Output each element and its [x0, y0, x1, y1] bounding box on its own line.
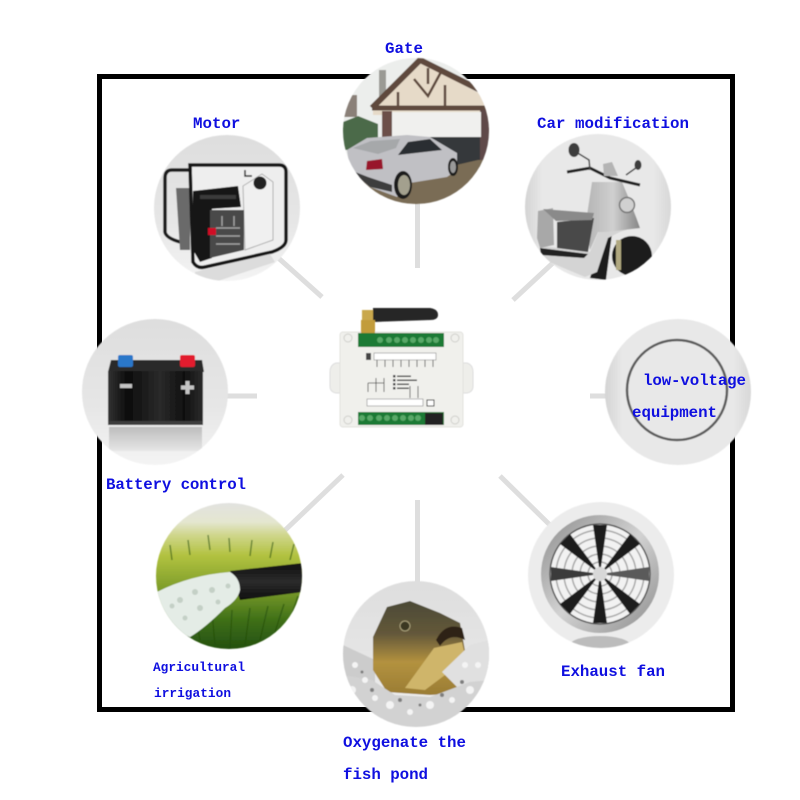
- spec text blocks: [366, 353, 417, 390]
- minus sign: [120, 384, 132, 388]
- fish eye: [400, 621, 410, 631]
- label: motor: Motor: [193, 115, 240, 133]
- footwell: [557, 218, 594, 252]
- label: car modification: Car modification: [537, 115, 689, 133]
- bumper shadow: [356, 172, 392, 192]
- label: gate: Gate: [385, 40, 423, 58]
- ground: [195, 254, 275, 282]
- module housing: [340, 332, 463, 427]
- inner white disc: [550, 524, 650, 624]
- label: oxygenate the: Oxygenate the: [343, 734, 466, 752]
- application: fish pond: [343, 581, 490, 730]
- label: low-voltage: low-voltage: [643, 372, 746, 390]
- plus sign: [181, 381, 194, 394]
- front wheel: [612, 236, 652, 276]
- concentric guards: [556, 530, 644, 618]
- fish mouth: [436, 626, 465, 646]
- wire ring: [627, 340, 727, 440]
- water speckles: [348, 662, 481, 715]
- dark under frame: [590, 234, 612, 280]
- battery base rim: [108, 421, 203, 425]
- application: agricultural irrigation: [156, 503, 303, 649]
- mirrors: [576, 152, 640, 175]
- rear engine parts: [176, 188, 190, 250]
- engine tank: [193, 186, 241, 210]
- relay output screw strips: [367, 353, 436, 406]
- rear frame: [165, 170, 192, 242]
- label: exhaust fan: Exhaust fan: [561, 663, 665, 681]
- label: agricultural: Agricultural: [153, 660, 245, 675]
- front fork: [616, 240, 621, 270]
- pump outlet: [254, 176, 266, 190]
- module mounting ears: [330, 363, 473, 393]
- garage opening: [428, 137, 480, 167]
- windscreen: [603, 162, 618, 176]
- tank window: [200, 195, 236, 199]
- application: scooter: [525, 134, 671, 280]
- hub: [593, 567, 607, 581]
- driveway: [360, 159, 484, 205]
- battery lid: [108, 360, 204, 372]
- learn button: [427, 400, 434, 406]
- car side windows: [398, 139, 442, 155]
- fish body: [373, 601, 466, 695]
- dark floor edge: [540, 248, 588, 258]
- pipe: [230, 563, 303, 600]
- seat: [543, 209, 594, 221]
- bottom green terminal: [358, 412, 444, 425]
- fan blades: [551, 525, 649, 623]
- connector lines from module to applications: [225, 200, 610, 585]
- tail light: [366, 159, 383, 170]
- application: battery: [82, 319, 228, 465]
- blue terminal: [118, 355, 133, 367]
- water foreground: [343, 675, 490, 730]
- headlight: [620, 198, 634, 212]
- wiring diagram details: [368, 360, 433, 398]
- bottom shadow: [570, 636, 630, 654]
- corner screws: [344, 334, 459, 424]
- foam texture: [170, 584, 230, 620]
- filler cap: [245, 170, 252, 176]
- top green terminal: [358, 333, 444, 347]
- inside backdrop: [192, 166, 284, 220]
- application: exhaust fan: [528, 502, 674, 654]
- roof and beams: [372, 60, 490, 108]
- label: equipment: equipment: [632, 404, 717, 422]
- antenna: [361, 308, 438, 345]
- application: low-voltage equipment: [605, 319, 751, 465]
- wheels: [394, 171, 412, 199]
- garage door: [392, 112, 481, 137]
- red switch: [208, 228, 216, 235]
- application: motor water pump: [154, 135, 300, 282]
- fish belly: [405, 642, 465, 690]
- label: fish pond: fish pond: [343, 766, 428, 784]
- foam jet: [157, 572, 240, 637]
- house wall: [373, 62, 488, 115]
- trees: [343, 116, 378, 150]
- front frame: [190, 165, 286, 267]
- pump housing: [243, 174, 273, 250]
- car body: [347, 135, 457, 197]
- side building: [343, 95, 357, 117]
- dc socket: [425, 413, 443, 425]
- reflection: [109, 427, 202, 451]
- lower frame: [542, 230, 624, 277]
- red terminal: [180, 355, 195, 367]
- application: gate: [343, 58, 490, 204]
- battery body: [108, 371, 203, 425]
- label: battery control: Battery control: [106, 476, 246, 494]
- label: irrigation: irrigation: [154, 686, 231, 701]
- grass blades: [170, 535, 298, 648]
- central relay module: [330, 308, 473, 427]
- frame: black square outline: [100, 76, 732, 710]
- water behind fish: [343, 640, 490, 727]
- handlebar: [567, 168, 640, 185]
- brick pillars: [382, 111, 392, 141]
- engine core: [210, 210, 244, 258]
- seat box: [537, 208, 554, 248]
- engine side: [193, 208, 212, 262]
- sky: [364, 74, 468, 79]
- splash at front: [442, 640, 490, 690]
- car rear window: [353, 139, 400, 154]
- outer metal ring: [541, 515, 659, 633]
- front shield: [586, 182, 640, 250]
